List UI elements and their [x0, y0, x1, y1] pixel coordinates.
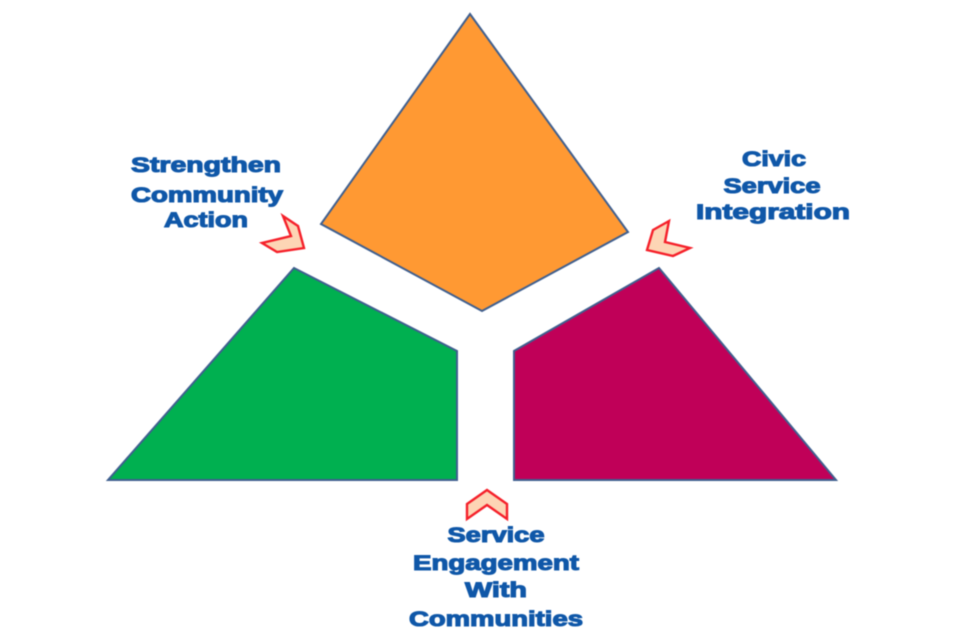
label: Strengthen Community Action — [131, 154, 283, 232]
panel: orange top kite — [321, 14, 628, 311]
label: Strengthen Community Action: Community — [131, 184, 283, 207]
label: Service Engagement With Communities: Service — [448, 524, 544, 547]
arrow: bottom chevron — [467, 490, 507, 519]
label: Service Engagement With Communities: Communities — [409, 608, 583, 631]
label: Civic Service Integration: Civic — [742, 148, 806, 171]
arrow: right chevron — [647, 221, 690, 256]
label: Service Engagement With Communities: With — [465, 579, 527, 602]
label: Civic Service Integration — [696, 148, 850, 224]
label: Service Engagement With Communities — [409, 524, 583, 631]
label: Civic Service Integration: Service — [724, 175, 820, 198]
label: Civic Service Integration: Integration — [696, 201, 850, 224]
panel: magenta right shape — [514, 268, 836, 480]
label: Strengthen Community Action: Action — [164, 209, 248, 232]
label: Strengthen Community Action: Strengthen — [131, 154, 281, 177]
label: Service Engagement With Communities: Engagement — [413, 552, 579, 575]
panel: green left shape — [108, 268, 457, 480]
arrow: left chevron — [262, 216, 304, 252]
